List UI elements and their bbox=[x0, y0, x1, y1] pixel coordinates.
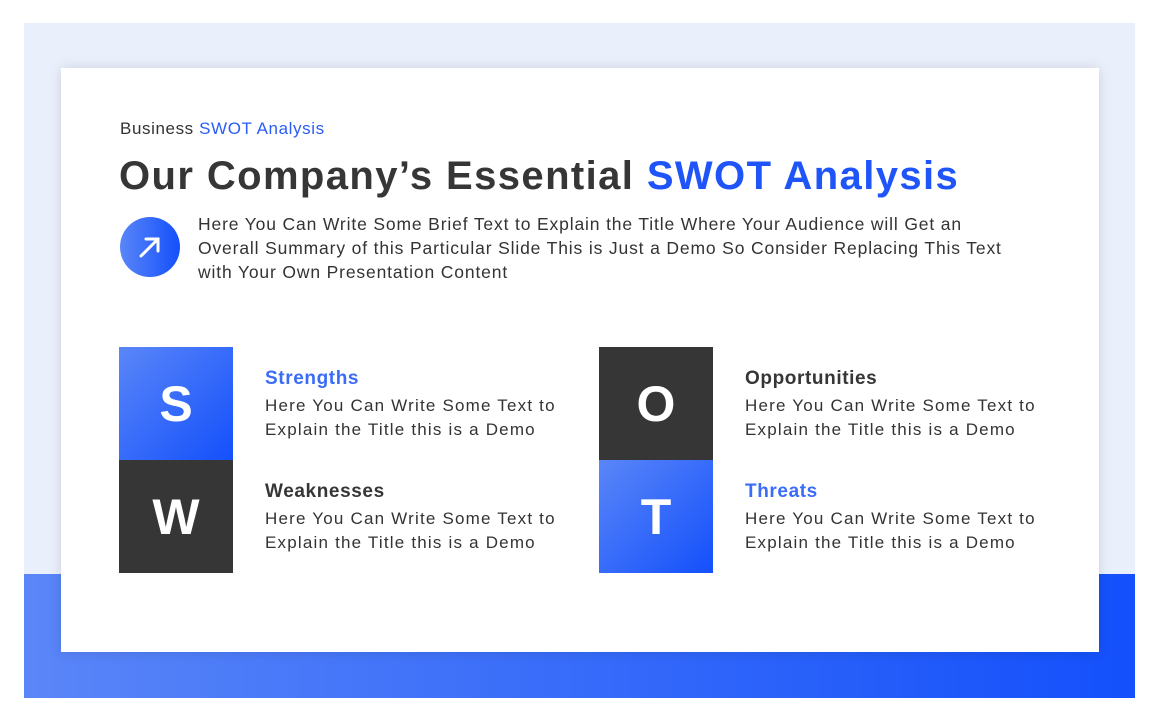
threats text: Here You Can Write Some Text to bbox=[745, 509, 1036, 528]
threats text: Explain the Title this is a Demo bbox=[745, 533, 1016, 552]
weaknesses heading: Weaknesses bbox=[265, 481, 385, 502]
S block: S bbox=[159, 376, 193, 432]
strengths text: Explain the Title this is a Demo bbox=[265, 420, 536, 439]
strengths text bbox=[265, 396, 556, 439]
opportunities heading: Opportunities bbox=[745, 368, 877, 389]
strengths text: Here You Can Write Some Text to bbox=[265, 396, 556, 415]
subtitle: Business SWOT Analysis bbox=[120, 119, 325, 138]
intro text: with Your Own Presentation Content bbox=[198, 262, 508, 282]
threats heading: Threats bbox=[745, 481, 818, 502]
opportunities text bbox=[745, 396, 1036, 439]
bottom blue band bbox=[24, 574, 1135, 698]
W block: W bbox=[152, 488, 200, 544]
T block: T bbox=[641, 488, 671, 544]
opportunities text: Explain the Title this is a Demo bbox=[745, 420, 1016, 439]
intro text: Overall Summary of this Particular Slide This is Just a Demo So Consider Replacing This Text bbox=[198, 238, 1002, 258]
intro text: Here You Can Write Some Brief Text to Explain the Title Where Your Audience will Get an bbox=[198, 214, 962, 234]
opportunities text: Here You Can Write Some Text to bbox=[745, 396, 1036, 415]
weaknesses text: Explain the Title this is a Demo bbox=[265, 533, 536, 552]
O block: O bbox=[637, 376, 675, 432]
icon: arrow circle bbox=[120, 217, 180, 277]
threats text bbox=[745, 509, 1036, 552]
white card bbox=[61, 68, 1099, 652]
weaknesses text: Here You Can Write Some Text to bbox=[265, 509, 556, 528]
O block bbox=[599, 347, 713, 460]
S block bbox=[119, 347, 233, 460]
weaknesses text bbox=[265, 509, 556, 552]
T block bbox=[599, 460, 713, 573]
strengths heading: Strengths bbox=[265, 368, 359, 389]
title: Our Company’s Essential SWOT Analysis bbox=[119, 154, 959, 198]
W block bbox=[119, 460, 233, 573]
intro text bbox=[198, 214, 1002, 282]
